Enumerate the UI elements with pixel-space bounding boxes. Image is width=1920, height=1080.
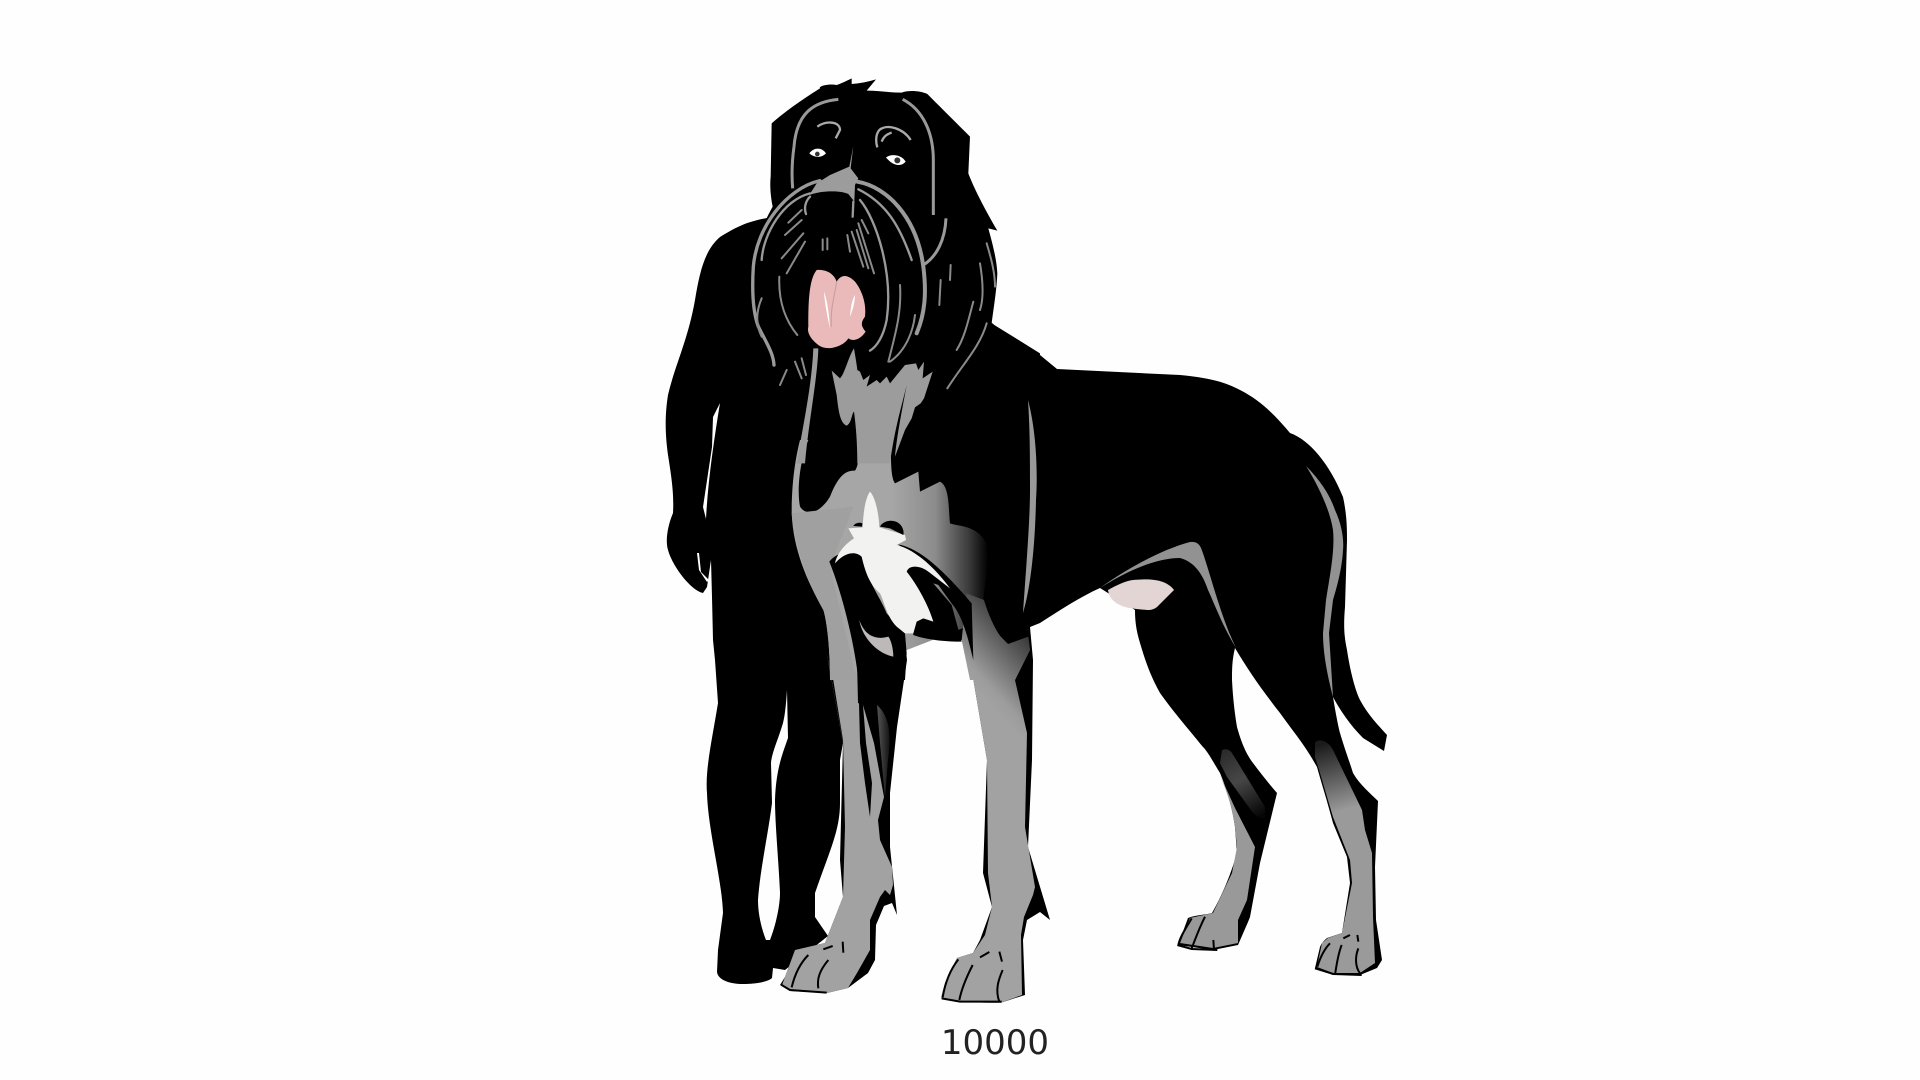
groin patch bbox=[1108, 579, 1174, 610]
dog front legs gray bbox=[782, 600, 1035, 1003]
chin stripe bbox=[797, 348, 818, 463]
leg black sliver bbox=[859, 703, 872, 817]
far hind leg bbox=[1180, 775, 1255, 948]
dog hind legs bbox=[1177, 740, 1375, 975]
jaw hook bbox=[923, 218, 946, 265]
face outline left bbox=[792, 99, 838, 188]
black left paw shape bbox=[829, 552, 907, 680]
right paw toes bbox=[942, 952, 1003, 1002]
hind toes bbox=[1177, 917, 1362, 975]
left paw toes bbox=[782, 942, 843, 993]
nose bridge gray bbox=[809, 146, 858, 202]
leg dark glow bbox=[877, 705, 890, 797]
gap between legs bbox=[758, 690, 788, 940]
light patch bbox=[859, 620, 893, 657]
muzzle strands bbox=[753, 181, 820, 365]
eyes bbox=[809, 149, 906, 165]
whisker strokes bbox=[757, 210, 995, 388]
tongue crease bbox=[831, 282, 837, 327]
dog head bbox=[752, 78, 1040, 400]
black edge bbox=[898, 544, 973, 660]
shoulder line bbox=[1023, 400, 1037, 613]
tongue highlights bbox=[824, 292, 855, 328]
brows bbox=[817, 123, 911, 147]
white blaze bbox=[835, 492, 950, 633]
right leg bbox=[941, 600, 1035, 1003]
body highlights bbox=[1023, 400, 1343, 697]
belly black bbox=[907, 565, 962, 642]
gap between arm and torso bbox=[703, 403, 720, 519]
rump stripe bbox=[1306, 466, 1343, 697]
small dark marks bbox=[853, 521, 904, 535]
near hind leg bbox=[1315, 740, 1375, 973]
chest fill bbox=[792, 440, 988, 680]
far hind leg glow bbox=[1220, 749, 1265, 818]
neck gray bbox=[832, 348, 933, 463]
right shoulder gray bbox=[962, 593, 1030, 680]
dog body bbox=[780, 300, 1387, 1003]
chest markings bbox=[792, 440, 1030, 680]
face outline right bbox=[903, 99, 933, 215]
neck fur bbox=[797, 348, 933, 463]
tongue bbox=[808, 270, 866, 348]
paw toes bbox=[782, 942, 1003, 1002]
number label: 10000 bbox=[941, 1023, 1049, 1063]
head and mane silhouette bbox=[752, 78, 1040, 400]
left leg bbox=[782, 660, 893, 993]
gap at hand bbox=[697, 553, 709, 582]
human silhouette bbox=[666, 200, 843, 984]
belly stripe bbox=[1100, 542, 1236, 648]
